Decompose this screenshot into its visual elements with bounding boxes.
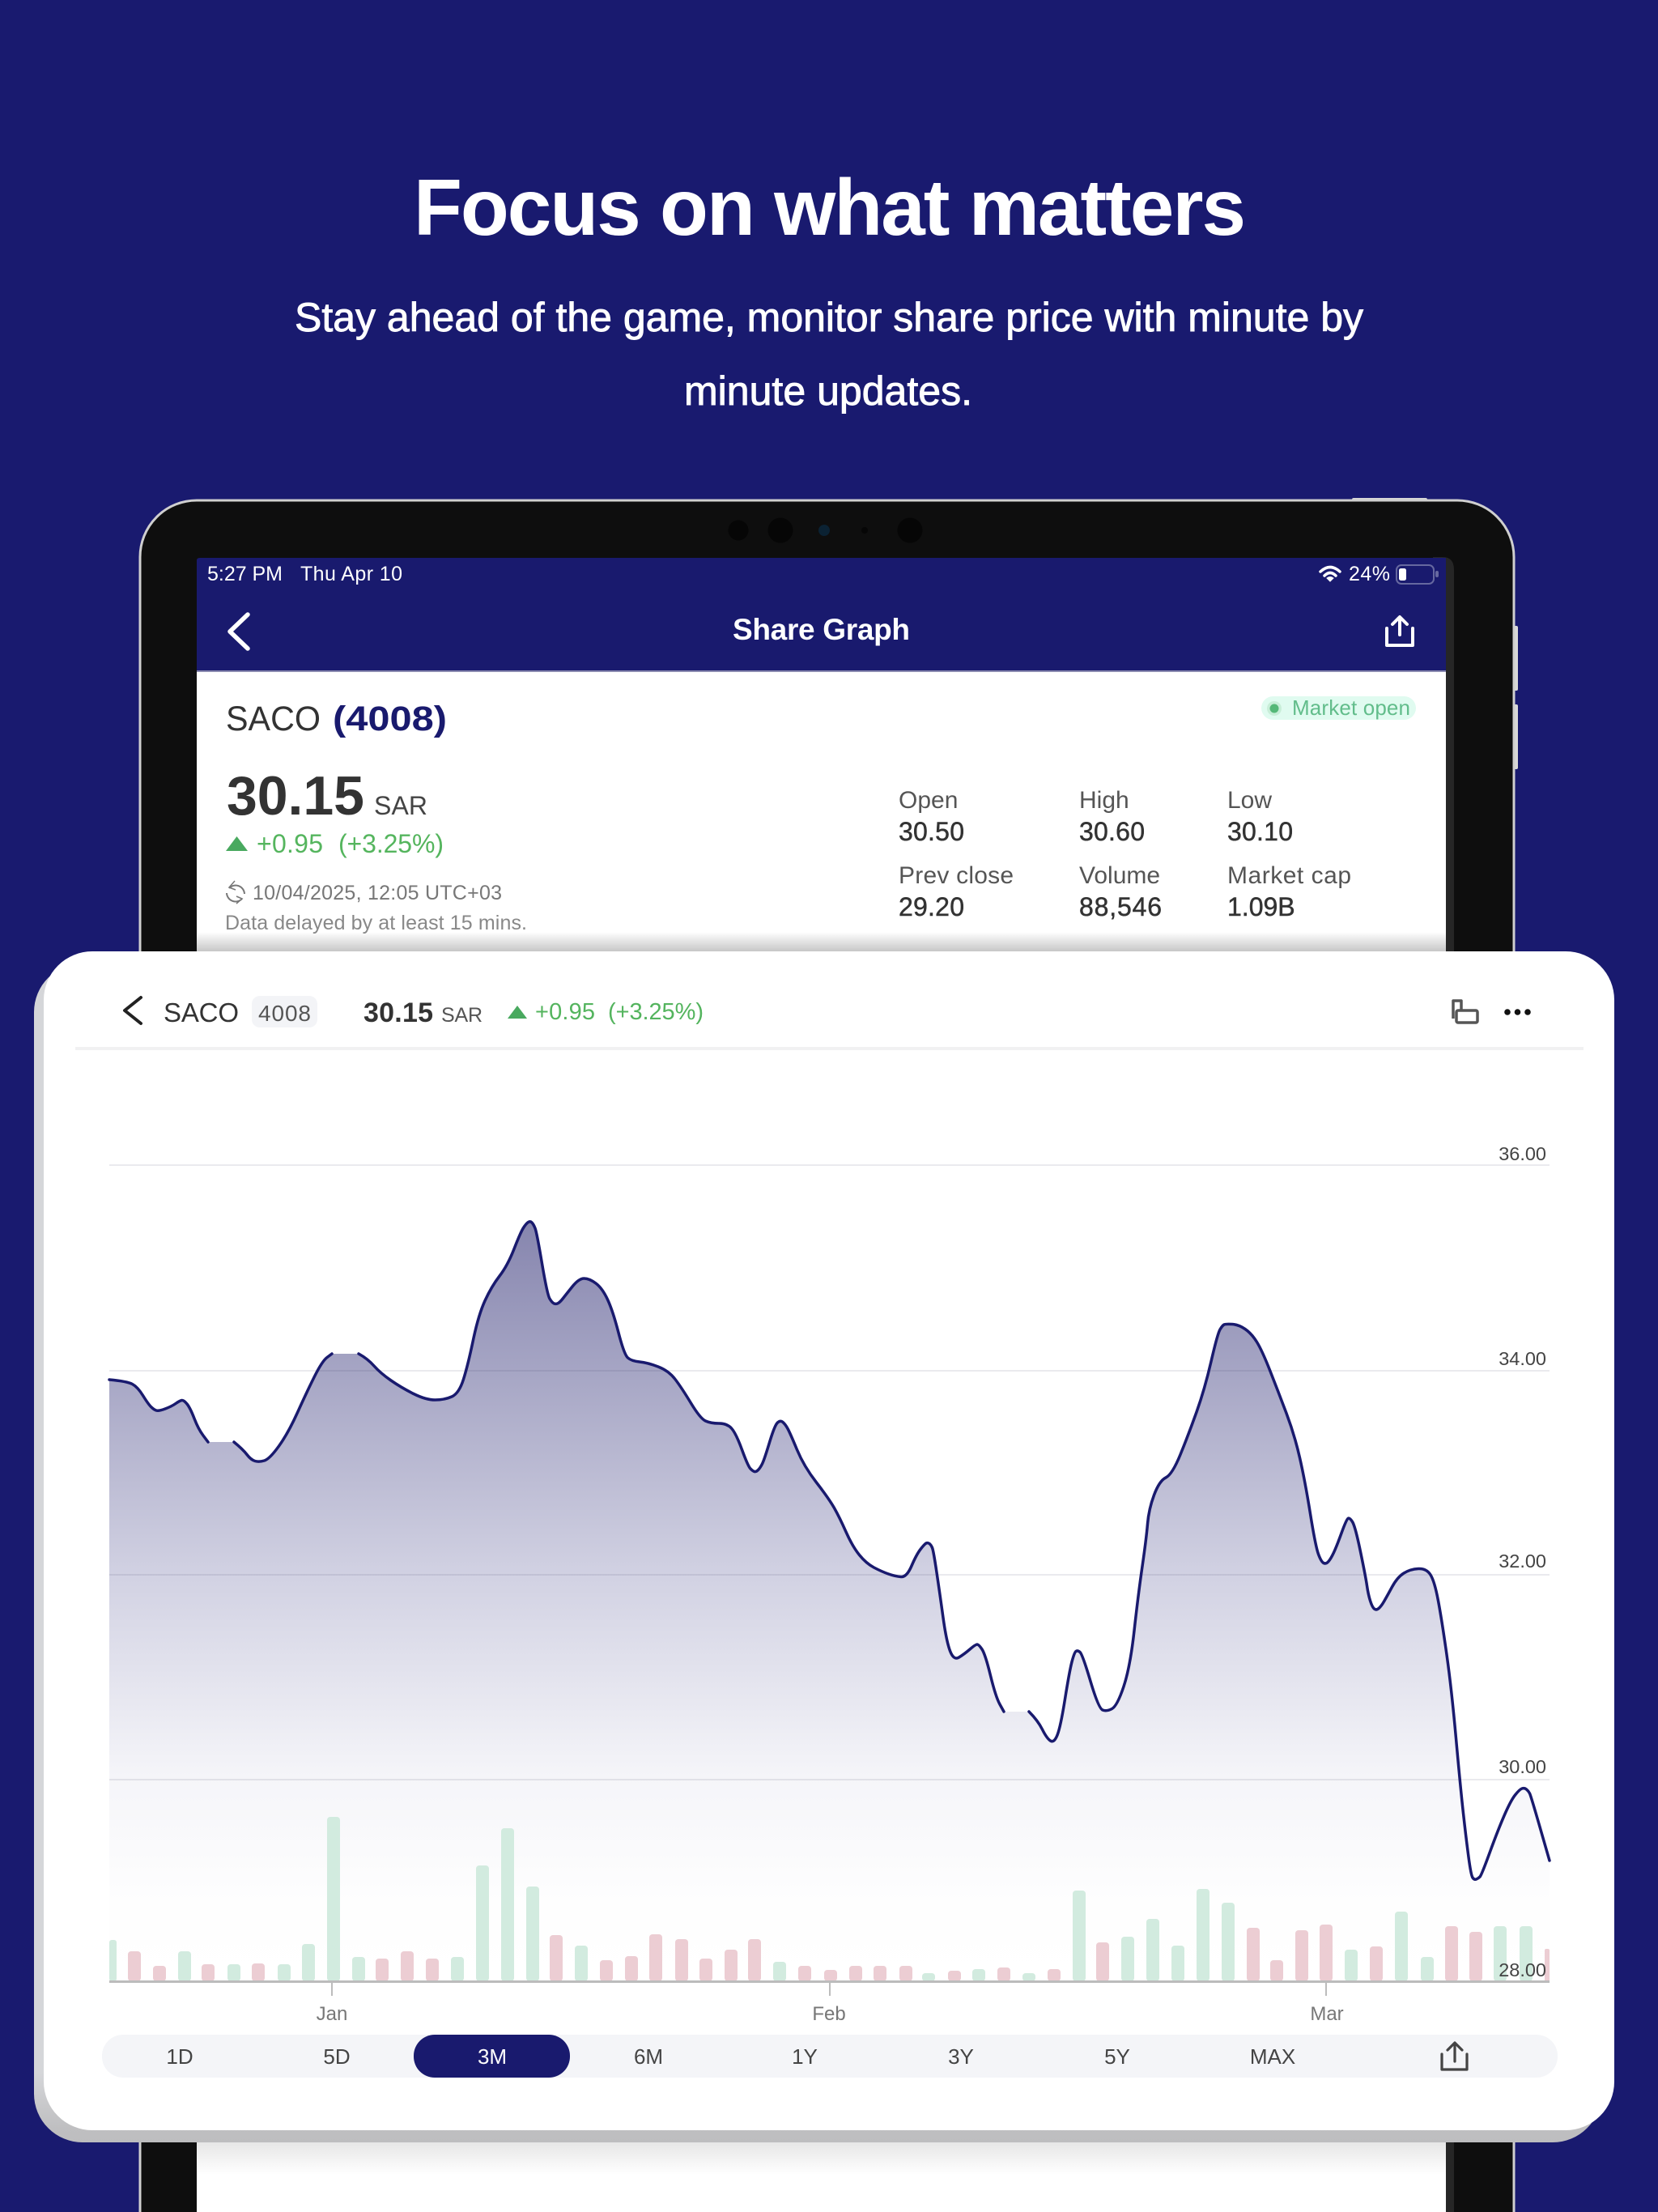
card underlay — [34, 963, 1601, 2142]
x axis — [109, 1980, 1550, 1996]
tab labels: 3M — [478, 2044, 507, 2069]
tab labels: 1Y — [792, 2044, 818, 2069]
grid lines — [109, 1164, 1550, 1780]
price chart — [109, 1143, 1550, 2025]
timestamp — [225, 881, 527, 934]
icon: wifi — [1320, 567, 1340, 581]
stats grid: High — [1079, 787, 1129, 814]
stats grid: 30.50 — [899, 817, 964, 846]
month labels: Feb — [812, 2003, 846, 2025]
header price: 30.15 — [363, 998, 433, 1028]
battery percent: 24% — [1349, 563, 1390, 585]
price change: +0.95 — [257, 829, 323, 858]
tab labels: 5D — [323, 2044, 351, 2069]
stats grid: Low — [1227, 787, 1272, 814]
tablet device — [140, 498, 1518, 2212]
stats grid: Prev close — [899, 862, 1014, 889]
subtitle — [295, 295, 1363, 414]
volume bars: up days — [109, 1817, 1533, 1981]
stock heading — [226, 700, 447, 738]
shade above card — [197, 932, 1446, 952]
navigation bar — [197, 558, 1446, 672]
ticker name: SACO — [164, 998, 239, 1027]
icon: rotate — [1453, 1001, 1477, 1023]
price change: (+3.25%) — [338, 829, 444, 858]
y axis labels: 28.00 — [1499, 1959, 1546, 1980]
tab labels: 5Y — [1104, 2044, 1130, 2069]
camera array — [729, 518, 923, 542]
status bar time and date: 5:27 PM — [207, 563, 283, 585]
shade below card — [197, 2142, 1446, 2175]
price change — [226, 829, 444, 858]
stats grid — [899, 787, 1351, 921]
month labels: Jan — [317, 2003, 347, 2025]
stats grid: 30.10 — [1227, 817, 1293, 846]
title: Focus on what matters — [414, 163, 1246, 252]
subtitle: minute updates. — [684, 368, 972, 414]
stats grid: 29.20 — [899, 892, 964, 921]
ticker code chip: 4008 — [258, 1001, 311, 1026]
selected tab — [414, 2035, 570, 2078]
tab labels — [166, 2044, 1295, 2069]
tab labels: 6M — [634, 2044, 663, 2069]
y axis labels — [1499, 1143, 1546, 1980]
stats grid: 88,546 — [1079, 892, 1162, 921]
icon: share — [1387, 617, 1413, 645]
time range tabs — [102, 2035, 1558, 2078]
nav title: Share Graph — [733, 613, 910, 646]
tab labels: 3Y — [948, 2044, 974, 2069]
tablet frame — [140, 500, 1514, 2212]
stock heading: (4008) — [333, 700, 447, 738]
price: 30.15 — [227, 765, 364, 827]
header change — [508, 999, 704, 1025]
stats grid: Volume — [1079, 862, 1160, 889]
price line — [109, 1222, 1550, 1879]
screen — [197, 671, 1446, 2212]
icon: back chevron — [230, 615, 248, 649]
card header — [75, 996, 1584, 1050]
screen edge — [1433, 557, 1454, 2212]
month labels: Mar — [1310, 2003, 1344, 2025]
stats grid: Market cap — [1227, 862, 1351, 889]
price — [227, 765, 427, 827]
icon: share — [1442, 2043, 1467, 2069]
icon: back chevron — [125, 998, 141, 1023]
tab labels: MAX — [1250, 2044, 1295, 2069]
stats grid: 30.60 — [1079, 817, 1145, 846]
header change: (+3.25%) — [608, 999, 704, 1025]
volume bars: down days — [128, 1925, 1550, 1981]
timestamp: 10/04/2025, 12:05 UTC+03 — [253, 882, 502, 904]
stock heading: SACO — [226, 700, 321, 738]
header divider — [75, 1047, 1584, 1050]
stats grid: Open — [899, 787, 958, 814]
tab labels: 1D — [166, 2044, 193, 2069]
y axis labels: 30.00 — [1499, 1756, 1546, 1777]
header change: +0.95 — [535, 999, 595, 1025]
icon: more — [1504, 1009, 1531, 1015]
y axis labels: 32.00 — [1499, 1551, 1546, 1572]
tablet hardware buttons — [1352, 498, 1518, 769]
area fill — [109, 1222, 1550, 1981]
card surface — [44, 951, 1614, 2130]
y axis labels: 36.00 — [1499, 1143, 1546, 1164]
month labels — [317, 2003, 1344, 2025]
status bar time and date — [207, 563, 402, 585]
price: SAR — [374, 791, 427, 820]
timestamp: Data delayed by at least 15 mins. — [225, 912, 527, 934]
chart card — [34, 951, 1614, 2142]
ticker code chip — [252, 996, 317, 1027]
card header: SAR — [441, 1004, 483, 1027]
market open badge: Market open — [1292, 696, 1410, 720]
subtitle: Stay ahead of the game, monitor share price with minute by — [295, 295, 1363, 340]
stats grid: 1.09B — [1227, 892, 1295, 921]
y axis labels: 34.00 — [1499, 1348, 1546, 1369]
status bar time and date: Thu Apr 10 — [300, 563, 402, 585]
icon: battery — [1397, 565, 1439, 584]
